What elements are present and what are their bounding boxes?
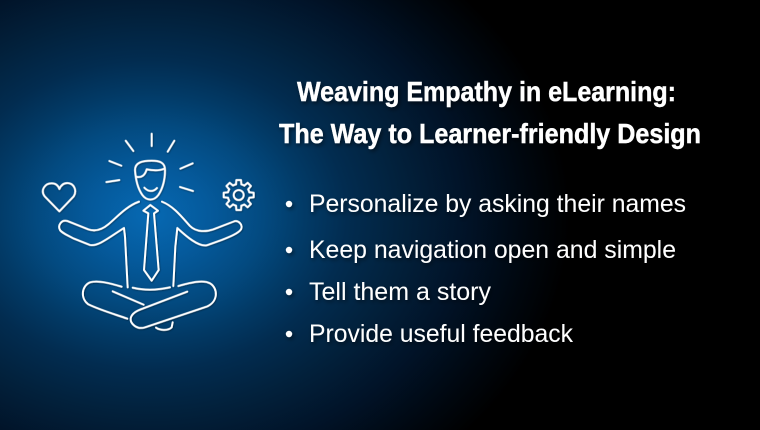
icon: necktie [143, 205, 159, 281]
bullet 3: Tell them a story [309, 278, 491, 306]
title: The Way to Learner-friendly Design [279, 118, 701, 149]
icon: head [135, 161, 165, 199]
icon: crossed legs [83, 281, 216, 330]
icon: arms and torso [59, 202, 242, 290]
bullet 2: Keep navigation open and simple [309, 236, 676, 264]
icon: radiating lines [106, 134, 193, 191]
bullet 4: Provide useful feedback [309, 320, 573, 348]
bullet list [286, 190, 686, 348]
title: Weaving Empathy in eLearning: [297, 76, 676, 107]
bullet 1: Personalize by asking their names [309, 190, 686, 218]
title [279, 76, 701, 149]
illustration: meditating businessman [43, 134, 254, 330]
icon: heart [43, 183, 75, 211]
icon: gear [224, 180, 254, 210]
